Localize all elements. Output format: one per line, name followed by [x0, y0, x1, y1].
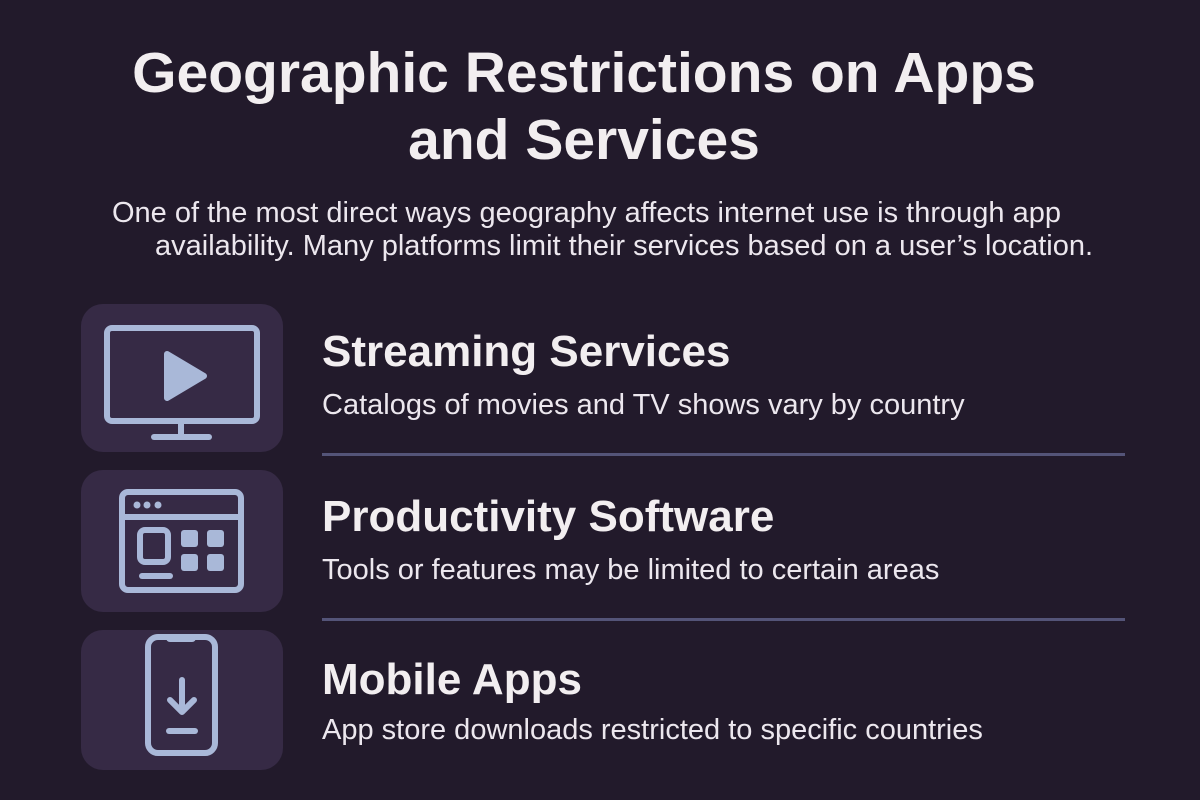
heading: streaming: Streaming Services — [322, 327, 730, 376]
subtitle: One of the most direct ways geography affects internet use is through app — [112, 197, 1061, 229]
title — [132, 41, 1036, 172]
heading: productivity: Productivity Software — [322, 492, 774, 541]
icon: TV with play button — [81, 304, 283, 452]
description: productivity: Tools or features may be limited to certain areas — [322, 554, 939, 586]
subtitle — [112, 197, 1093, 262]
icon: phone download — [81, 630, 283, 770]
title: and Services — [408, 108, 760, 172]
description: streaming: Catalogs of movies and TV shows vary by country — [322, 389, 965, 421]
heading: mobile: Mobile Apps — [322, 655, 582, 704]
title: Geographic Restrictions on Apps — [132, 41, 1036, 105]
icon: app window — [81, 470, 283, 612]
subtitle: availability. Many platforms limit their services based on a user’s location. — [155, 230, 1093, 262]
description: mobile: App store downloads restricted to specific countries — [322, 714, 983, 746]
